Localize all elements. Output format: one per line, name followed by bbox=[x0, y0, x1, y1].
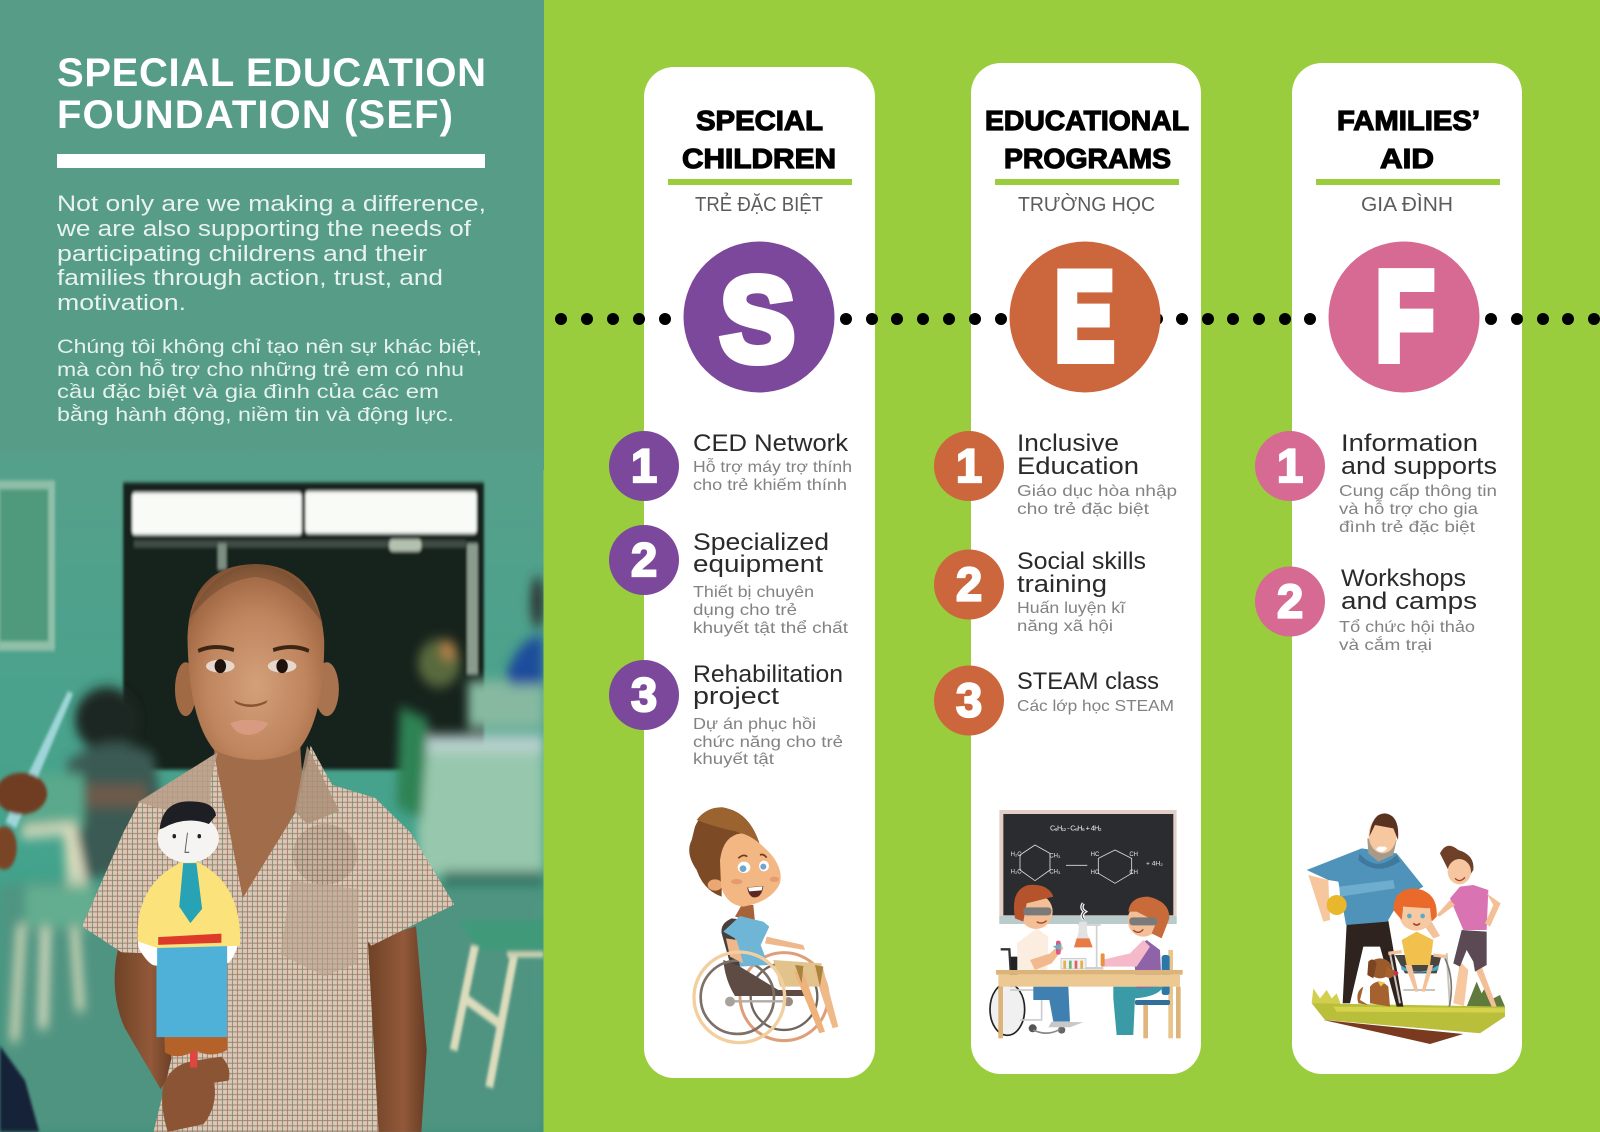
puppet: trousers and shoes bbox=[156, 944, 227, 1056]
puppet: stick bbox=[190, 1050, 197, 1068]
blackboard: H₂C bbox=[1011, 852, 1022, 858]
item 3 text bbox=[1017, 668, 1174, 715]
heading rule bbox=[1316, 179, 1500, 185]
grass and ground bbox=[1312, 982, 1505, 1044]
text block: English intro: families through action, trust, and bbox=[57, 265, 443, 290]
text block: English intro: participating childrens and their bbox=[57, 241, 427, 266]
item 2 number badge bbox=[1255, 566, 1325, 636]
child in wheelchair bbox=[1388, 888, 1451, 1007]
item 3 text: Rehabilitation bbox=[693, 661, 843, 688]
illustration: children doing science at a table bbox=[990, 810, 1183, 1038]
boy: head and face bbox=[187, 564, 324, 760]
text block: English intro: we are also supporting the needs of bbox=[56, 216, 472, 241]
item 2 number badge: 2 bbox=[1277, 574, 1303, 628]
text block: English intro: motivation. bbox=[57, 290, 186, 315]
photo background: poster on wall bbox=[0, 480, 55, 651]
item 2 text: Thiết bị chuyên bbox=[693, 584, 814, 601]
puppet: yellow torso with white hands bbox=[137, 859, 240, 966]
heading: Special Children bbox=[682, 105, 836, 174]
item 2 text: training bbox=[1017, 571, 1107, 598]
item 1 number badge bbox=[934, 431, 1004, 501]
title underline bar bbox=[57, 154, 485, 168]
title bbox=[57, 51, 486, 137]
heading rule bbox=[668, 179, 852, 185]
heading: Educational Programs: PROGRAMS bbox=[1004, 143, 1171, 174]
text block: Vietnamese intro: bằng hành động, niềm tin và động lực. bbox=[57, 403, 454, 426]
item 2 text: và cắm trại bbox=[1339, 635, 1432, 654]
item 2 text: Specialized bbox=[693, 529, 829, 556]
item 2 number badge: 2 bbox=[631, 533, 657, 586]
boy: shirt collar and pocket bbox=[137, 746, 359, 976]
title: SPECIAL EDUCATION bbox=[57, 51, 486, 95]
item 1 text: and supports bbox=[1341, 453, 1497, 480]
photo top fade into teal bbox=[0, 435, 544, 465]
photo background: classroom wall and floor bbox=[0, 448, 544, 1132]
illustration: family with child in wheelchair bbox=[1307, 813, 1505, 1044]
item 2 number badge bbox=[934, 550, 1004, 620]
girl scientist bbox=[1101, 897, 1173, 1038]
boy: checked shirt bbox=[82, 746, 454, 1132]
item 1 text: CED Network bbox=[693, 430, 849, 457]
wheelchair bbox=[990, 949, 1065, 1035]
blackboard: + 4H₂ bbox=[1146, 860, 1163, 867]
item 2 text: equipment bbox=[693, 551, 823, 578]
heading: Educational Programs bbox=[985, 105, 1189, 174]
heading: Families' Aid bbox=[1337, 105, 1480, 174]
illustration: child in wheelchair bbox=[689, 807, 838, 1043]
column: Special Children bbox=[609, 105, 852, 1043]
item 1 number badge bbox=[1255, 431, 1325, 501]
flask, test tubes and smoke bbox=[1061, 903, 1103, 969]
photo: boy holding paper puppet in classroom bbox=[0, 448, 545, 1132]
item 1 text bbox=[1017, 430, 1177, 518]
dog bbox=[1357, 958, 1398, 1007]
blackboard: CH bbox=[1129, 852, 1138, 858]
item 3 number badge: 3 bbox=[956, 674, 982, 726]
photo background: dark window with light panes bbox=[123, 483, 484, 770]
item 1 text bbox=[693, 430, 852, 494]
item 1 text: Information bbox=[1341, 430, 1478, 457]
panel: teal intro bbox=[0, 0, 544, 470]
title: FOUNDATION (SEF) bbox=[57, 93, 453, 137]
item 3 text: Các lớp học STEAM bbox=[1017, 698, 1174, 715]
item 2 text: and camps bbox=[1341, 588, 1477, 615]
item 1 number badge bbox=[609, 431, 679, 501]
boy: ears bbox=[175, 662, 339, 716]
panel: Families' Aid card bbox=[1292, 63, 1522, 1074]
item 3 text: project bbox=[693, 683, 779, 710]
heading: Families' Aid: FAMILIES’ bbox=[1337, 105, 1480, 136]
text block: Vietnamese intro: mà còn hỗ trợ cho những trẻ em có nhu bbox=[57, 358, 464, 381]
item 3 number badge: 3 bbox=[631, 668, 657, 721]
photo background: blurred chair front right bbox=[454, 920, 544, 1087]
item 2 text: Social skills bbox=[1017, 548, 1146, 575]
item 2 text: Huấn luyện kĩ bbox=[1017, 600, 1127, 617]
item 3 text: STEAM class bbox=[1017, 668, 1159, 695]
photo background: hand holding notebook at left bbox=[0, 691, 73, 1132]
item 1 number badge: 1 bbox=[956, 439, 982, 492]
item 2 text bbox=[1017, 548, 1146, 635]
heading: Families' Aid: AID bbox=[1380, 143, 1434, 174]
boy: fist holding puppet stick bbox=[162, 1057, 229, 1132]
text block: Vietnamese intro: Chúng tôi không chỉ tạo nên sự khác biệt, bbox=[57, 336, 482, 358]
puppet: tie bbox=[179, 863, 202, 923]
item 3 number badge bbox=[934, 666, 1004, 736]
table bbox=[996, 970, 1183, 1038]
blackboard: H₂C bbox=[1011, 869, 1022, 875]
photo background: blurred table, flowers and person on right bbox=[396, 576, 545, 885]
letter badge F bbox=[1328, 242, 1480, 392]
item 1 text: Giáo dục hòa nhập bbox=[1017, 483, 1177, 500]
item 3 text: chức năng cho trẻ bbox=[693, 734, 843, 751]
letter badge S bbox=[684, 242, 834, 392]
item 2 text: năng xã hội bbox=[1017, 618, 1113, 635]
dotted connector line bbox=[555, 313, 1600, 325]
mother bbox=[1437, 846, 1501, 1007]
column: Educational Programs bbox=[934, 105, 1189, 1038]
text block: Vietnamese intro bbox=[57, 336, 482, 426]
item 3 number badge bbox=[609, 660, 679, 730]
panel: Educational Programs card bbox=[971, 63, 1201, 1074]
item 2 text: dụng cho trẻ bbox=[693, 602, 797, 619]
boy scientist bbox=[1014, 885, 1083, 1027]
item 3 text: Dự án phục hồi bbox=[693, 716, 816, 733]
boy: arms bbox=[115, 926, 427, 1132]
item 1 text: Inclusive bbox=[1017, 430, 1119, 457]
item 2 number badge: 2 bbox=[956, 558, 982, 610]
father bbox=[1307, 813, 1423, 1007]
item 1 text: đình trẻ đặc biệt bbox=[1339, 519, 1476, 536]
panel: Special Children card bbox=[644, 67, 875, 1078]
Vietnamese label: TRƯỜNG HỌC bbox=[1018, 193, 1155, 216]
item 2 text: khuyết tật thể chất bbox=[693, 619, 849, 637]
blackboard: CH bbox=[1129, 870, 1138, 876]
photo background: blurred child and chair on left bbox=[14, 687, 161, 1041]
item 1 text: Hỗ trợ máy trợ thính bbox=[693, 457, 852, 476]
column: Families' Aid bbox=[1255, 105, 1505, 1044]
text block: English intro: Not only are we making a difference, bbox=[57, 191, 486, 216]
heading: Special Children: SPECIAL bbox=[696, 105, 823, 136]
item 2 number badge bbox=[609, 525, 679, 595]
item 1 text: Cung cấp thông tin bbox=[1339, 483, 1497, 500]
letter badge E: E bbox=[1055, 248, 1114, 386]
letter badge E bbox=[1010, 242, 1160, 392]
heading: Educational Programs: EDUCATIONAL bbox=[985, 105, 1189, 136]
item 2 text bbox=[693, 529, 849, 637]
blackboard: C₆H₁₂ - C₆H₆ + 4H₂ bbox=[1050, 824, 1102, 833]
item 1 text: cho trẻ đặc biệt bbox=[1017, 501, 1150, 518]
item 1 text: và hỗ trợ cho gia bbox=[1339, 499, 1478, 518]
blackboard: CH₃ bbox=[1049, 853, 1061, 859]
item 3 text bbox=[693, 661, 843, 768]
text block: Vietnamese intro: cầu đặc biệt và gia đình của các em bbox=[57, 381, 439, 403]
item 2 text bbox=[1339, 565, 1477, 654]
blackboard: HC bbox=[1091, 852, 1100, 858]
blackboard: HC bbox=[1091, 870, 1100, 876]
text block: English intro bbox=[56, 191, 486, 315]
heading rule bbox=[995, 179, 1179, 185]
item 1 number badge: 1 bbox=[1277, 439, 1303, 492]
boy: neck bbox=[214, 741, 304, 902]
Vietnamese label: GIA ĐÌNH bbox=[1361, 193, 1453, 216]
item 1 text: cho trẻ khiếm thính bbox=[693, 477, 847, 494]
item 1 text: Education bbox=[1017, 453, 1139, 480]
item 1 number badge: 1 bbox=[631, 439, 657, 492]
item 2 text: Workshops bbox=[1341, 565, 1466, 592]
blackboard: CH₃ bbox=[1049, 869, 1061, 875]
letter badge S: S bbox=[720, 253, 795, 387]
blackboard bbox=[999, 810, 1177, 924]
item 3 text: khuyết tật bbox=[693, 751, 775, 768]
heading: Special Children: CHILDREN bbox=[682, 143, 836, 174]
puppet: head bbox=[157, 801, 219, 863]
Vietnamese label: TRẺ ĐẶC BIỆT bbox=[695, 193, 823, 216]
item 1 text bbox=[1339, 430, 1497, 536]
letter badge F: F bbox=[1376, 248, 1434, 386]
item 2 text: Tổ chức hội thảo bbox=[1339, 618, 1475, 636]
